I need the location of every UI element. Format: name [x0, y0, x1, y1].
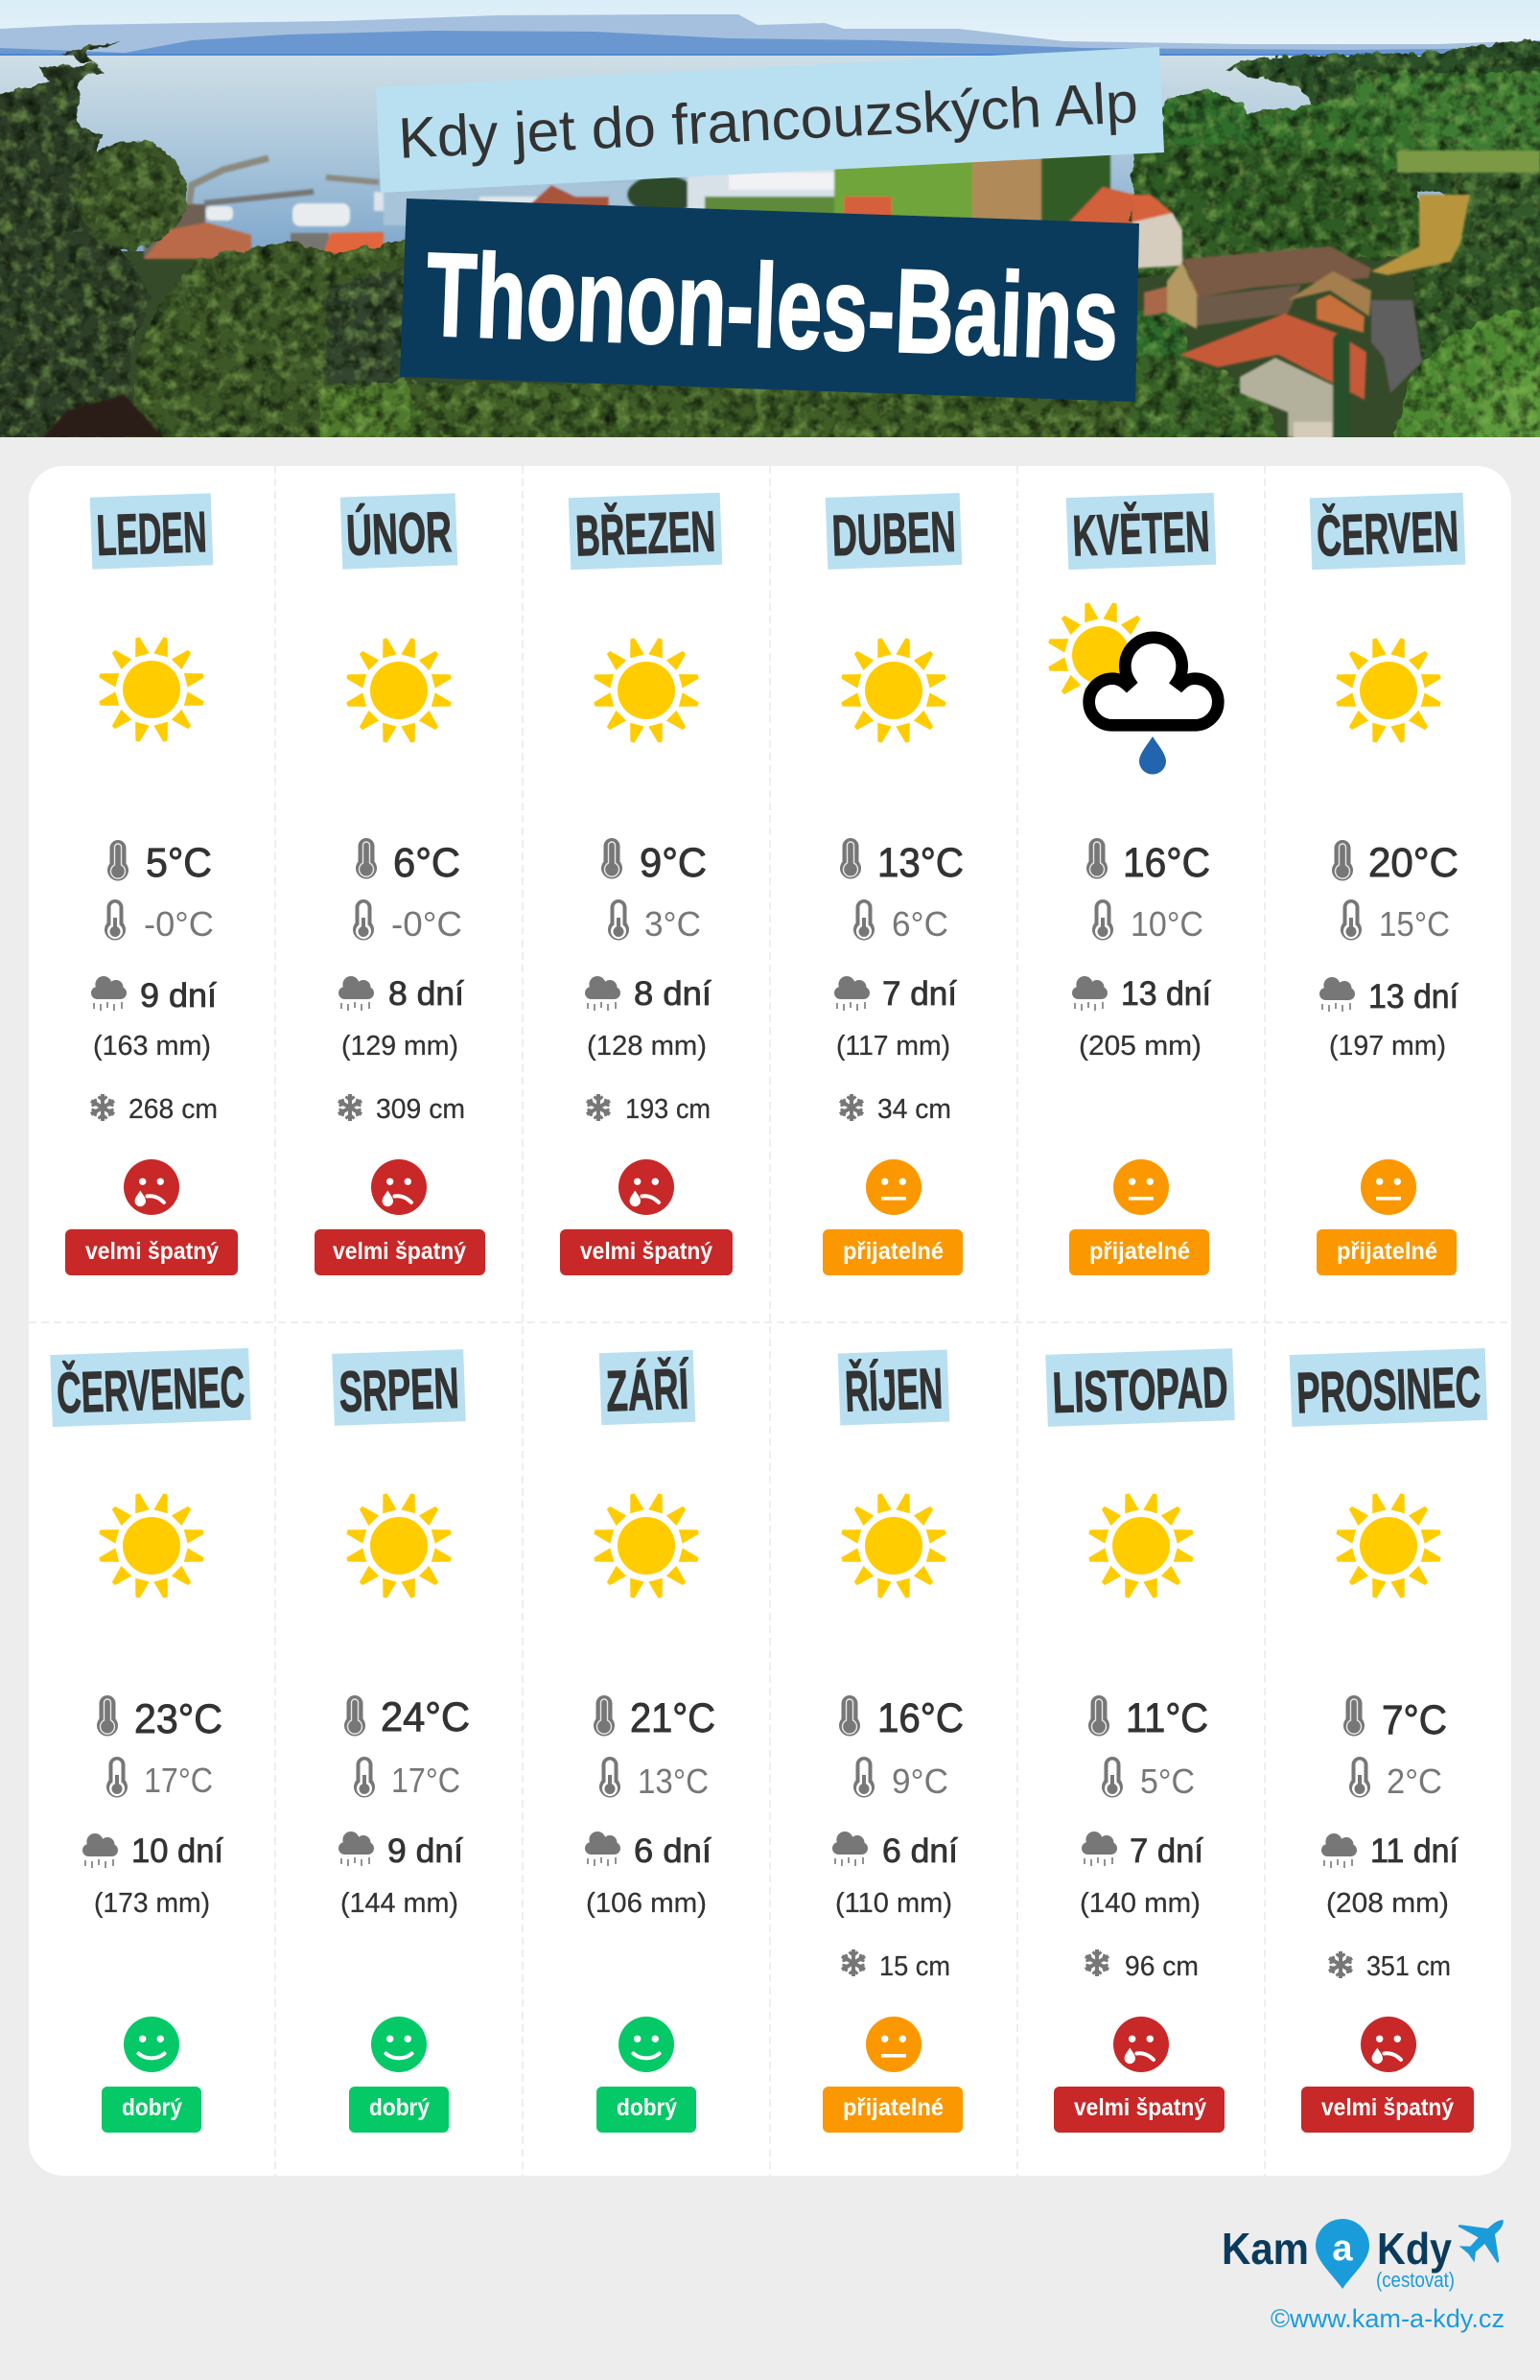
- icon: min thermometer: [1349, 1757, 1370, 1797]
- month heading: [90, 493, 213, 570]
- icon: snowflake: [338, 1094, 362, 1121]
- icon: min thermometer: [608, 899, 629, 940]
- snowfall: 34 cm: [877, 1094, 951, 1125]
- precipitation: (110 mm): [835, 1888, 952, 1919]
- icon: min thermometer: [1102, 1757, 1123, 1797]
- min temperature: 13°C: [638, 1762, 709, 1801]
- month heading: SRPEN: [338, 1356, 460, 1424]
- panel: June: [1310, 493, 1465, 1275]
- icon: sun: [840, 1492, 947, 1599]
- icon: map pin: a: [1332, 2228, 1353, 2269]
- min temperature: -0°C: [391, 904, 462, 944]
- rating badge: velmi špatný: [1321, 2094, 1454, 2121]
- month heading: LISTOPAD: [1051, 1355, 1229, 1425]
- rating badge: [65, 1229, 238, 1275]
- month heading: [1066, 493, 1216, 570]
- max temperature: 23°C: [134, 1696, 222, 1742]
- min temperature: 10°C: [1131, 904, 1203, 944]
- month heading: [838, 1350, 949, 1425]
- rainy days: 13 dní: [1368, 978, 1458, 1015]
- month heading: [1045, 1348, 1235, 1427]
- icon: min thermometer: [353, 899, 374, 940]
- icon: sun: [1335, 1492, 1442, 1599]
- icon: max thermometer: [356, 838, 377, 878]
- icon: min thermometer: [599, 1757, 620, 1797]
- icon: min thermometer: [354, 1757, 375, 1797]
- precipitation: (208 mm): [1326, 1888, 1449, 1919]
- snowfall: 351 cm: [1366, 1951, 1451, 1982]
- icon: crying face: [124, 1159, 179, 1215]
- max temperature: 7°C: [1382, 1697, 1447, 1743]
- title banner: [400, 198, 1139, 402]
- panel: May: [1047, 493, 1218, 1275]
- min temperature: 17°C: [391, 1761, 460, 1800]
- month heading: DUBEN: [830, 500, 957, 568]
- max temperature: 16°C: [1123, 840, 1210, 886]
- min temperature: 6°C: [892, 904, 948, 944]
- icon: max thermometer: [594, 1695, 615, 1736]
- icon: rain cloud: [832, 1832, 868, 1866]
- icon: max thermometer: [840, 838, 861, 878]
- rating badge: [102, 2087, 201, 2133]
- rainy days: 7 dní: [882, 975, 957, 1013]
- icon: sun: [345, 1492, 453, 1599]
- icon: neutral face: [866, 2017, 922, 2072]
- snowfall: 268 cm: [128, 1094, 218, 1125]
- month heading: [1310, 493, 1465, 570]
- rating badge: [596, 2087, 696, 2133]
- logo: Kam a Kdy: Kdy: [1377, 2224, 1452, 2274]
- icon: rain cloud: [1319, 977, 1355, 1012]
- icon: rain cloud: [1321, 1833, 1357, 1868]
- icon: sun: [840, 637, 947, 744]
- icon: smiling face: [124, 2017, 179, 2072]
- panel: April: [823, 493, 964, 1275]
- month heading: ÚNOR: [345, 500, 453, 568]
- precipitation: (144 mm): [340, 1888, 458, 1919]
- max temperature: 6°C: [393, 840, 460, 886]
- icon: max thermometer: [1343, 1695, 1365, 1736]
- month heading: [332, 1349, 466, 1426]
- icon: crying face: [1361, 2017, 1416, 2072]
- min temperature: 3°C: [644, 904, 701, 944]
- month heading: [569, 493, 722, 570]
- icon: max thermometer: [839, 1695, 860, 1736]
- rating badge: [823, 2087, 963, 2133]
- rainy days: 8 dní: [634, 975, 712, 1013]
- max temperature: 16°C: [877, 1695, 964, 1741]
- icon: max thermometer: [601, 838, 622, 878]
- rating badge: velmi špatný: [1074, 2094, 1206, 2121]
- precipitation: (163 mm): [93, 1031, 211, 1062]
- icon: rain cloud: [1072, 976, 1108, 1011]
- panel: December: [1290, 1348, 1487, 2133]
- rainy days: 6 dní: [634, 1832, 712, 1870]
- icon: sun: [1335, 637, 1442, 744]
- icon: sun: [593, 1492, 700, 1599]
- icon: smiling face: [371, 2017, 427, 2072]
- month heading: BŘEZEN: [574, 499, 716, 569]
- panel: November: [1045, 1348, 1235, 2133]
- rating badge: velmi špatný: [333, 1238, 466, 1265]
- panel: August: [332, 1349, 470, 2133]
- icon: min thermometer: [853, 899, 875, 940]
- icon: rain cloud: [1082, 1832, 1117, 1866]
- logo: Kam a Kdy: (cestovat): [1376, 2268, 1455, 2292]
- rating badge: [315, 1229, 485, 1275]
- icon: sun: [98, 1492, 205, 1599]
- rating badge: dobrý: [617, 2094, 677, 2121]
- rating badge: [349, 2087, 449, 2133]
- icon: sun: [345, 637, 453, 744]
- panel: March: [560, 493, 733, 1275]
- rating badge: dobrý: [122, 2094, 182, 2121]
- month heading: ŘÍJEN: [844, 1356, 944, 1424]
- logo: Kam a Kdy: Kam: [1222, 2224, 1309, 2274]
- icon: min thermometer: [1092, 899, 1113, 940]
- max temperature: 13°C: [877, 840, 964, 886]
- min temperature: 9°C: [892, 1762, 948, 1801]
- panel: February: [315, 493, 485, 1275]
- rainy days: 13 dní: [1121, 975, 1211, 1013]
- icon: min thermometer: [853, 1757, 875, 1797]
- precipitation: (129 mm): [341, 1031, 458, 1062]
- min temperature: 17°C: [144, 1761, 213, 1800]
- icon: rain cloud: [585, 1832, 620, 1866]
- website credit: ©www.kam-a-kdy.cz: [1271, 2304, 1505, 2333]
- icon: max thermometer: [97, 1695, 118, 1736]
- icon: rain cloud: [585, 976, 620, 1011]
- max temperature: 21°C: [630, 1695, 715, 1741]
- precipitation: (205 mm): [1079, 1031, 1202, 1062]
- snowfall: 96 cm: [1125, 1951, 1199, 1982]
- meadow and field: [1371, 151, 1540, 275]
- logo: Kam a Kdy: [1222, 2219, 1504, 2292]
- rainy days: 9 dní: [387, 1832, 463, 1870]
- rating badge: přijatelné: [843, 2094, 944, 2121]
- rainy days: 8 dní: [388, 975, 464, 1013]
- min temperature: 5°C: [1140, 1762, 1195, 1801]
- icon: neutral face: [1113, 1159, 1169, 1215]
- max temperature: 9°C: [640, 840, 707, 886]
- panel: September: [585, 1350, 715, 2133]
- subtitle text: Kdy jet do francouzských Alp: [397, 70, 1139, 171]
- month heading: ČERVENEC: [56, 1355, 245, 1425]
- icon: min thermometer: [106, 1757, 128, 1797]
- min temperature: 15°C: [1379, 904, 1450, 944]
- month heading: KVĚTEN: [1071, 500, 1211, 568]
- icon: crying face: [1113, 2017, 1169, 2072]
- icon: min thermometer: [1341, 899, 1362, 940]
- rating badge: [1317, 1229, 1457, 1275]
- rainy days: 10 dní: [131, 1832, 223, 1870]
- precipitation: (197 mm): [1329, 1031, 1446, 1062]
- precipitation: (140 mm): [1080, 1888, 1201, 1919]
- rating badge: [1301, 2087, 1474, 2133]
- harbour: [144, 158, 412, 259]
- icon: rain cloud: [834, 976, 870, 1011]
- icon: snowflake: [587, 1094, 610, 1121]
- icon: max thermometer: [344, 1695, 365, 1736]
- month heading: [826, 493, 962, 570]
- icon: neutral face: [866, 1159, 922, 1215]
- min temperature: -0°C: [144, 904, 214, 944]
- panel: July: [50, 1348, 251, 2133]
- rainy days: 7 dní: [1130, 1832, 1203, 1870]
- precipitation: (117 mm): [836, 1031, 950, 1062]
- icon: max thermometer: [107, 840, 128, 880]
- max temperature: 11°C: [1126, 1695, 1208, 1741]
- icon: smiling face: [618, 2017, 674, 2072]
- snowfall: 309 cm: [376, 1094, 465, 1125]
- min temperature: 2°C: [1387, 1762, 1442, 1801]
- icon: max thermometer: [1332, 840, 1353, 880]
- icon: crying face: [371, 1159, 427, 1215]
- houses: [1132, 195, 1422, 448]
- rating badge: [823, 1229, 963, 1275]
- icon: rain cloud: [91, 976, 127, 1011]
- icon: neutral face: [1361, 1159, 1416, 1215]
- icon: sun: [593, 637, 700, 744]
- marina and town between the banners: [383, 155, 1133, 226]
- rating badge: dobrý: [369, 2094, 430, 2121]
- max temperature: 24°C: [381, 1694, 470, 1740]
- icon: rain cloud: [338, 1832, 374, 1866]
- panel: January: [65, 493, 238, 1275]
- icon: min thermometer: [105, 899, 126, 940]
- icon: sun: [1087, 1492, 1195, 1599]
- month heading: ZÁŘÍ: [605, 1356, 690, 1423]
- icon: map pin: [1316, 2219, 1369, 2289]
- month heading: [340, 493, 457, 570]
- panel: calendar background: [29, 466, 1511, 2176]
- precipitation: (106 mm): [586, 1888, 707, 1919]
- rating badge: [1069, 1229, 1209, 1275]
- rainy days: 6 dní: [882, 1832, 958, 1870]
- icon: max thermometer: [1088, 1695, 1109, 1736]
- icon: snowflake: [1329, 1951, 1352, 1978]
- month heading: [50, 1348, 251, 1427]
- header photo: lake and town landscape: [0, 0, 1540, 479]
- rating badge: [1054, 2087, 1225, 2133]
- rating badge: [560, 1229, 733, 1275]
- icon: snowflake: [840, 1094, 863, 1121]
- rainy days: 11 dní: [1370, 1832, 1458, 1870]
- month heading: LEDEN: [95, 500, 208, 568]
- snowfall: 193 cm: [625, 1094, 711, 1125]
- subtitle banner: [376, 47, 1164, 193]
- max temperature: 5°C: [146, 840, 212, 886]
- month heading: [599, 1350, 695, 1425]
- rating badge: přijatelné: [1089, 1238, 1190, 1265]
- icon: rain cloud: [338, 976, 374, 1011]
- icon: sun with rain cloud: [1047, 601, 1218, 775]
- max temperature: 20°C: [1368, 840, 1458, 886]
- icon: max thermometer: [1086, 838, 1108, 878]
- rating badge: přijatelné: [843, 1238, 944, 1265]
- icon: crying face: [618, 1159, 674, 1215]
- snowfall: 15 cm: [879, 1951, 950, 1982]
- precipitation: (128 mm): [587, 1031, 707, 1062]
- icon: rain cloud: [82, 1833, 118, 1868]
- icon: airplane: [1458, 2220, 1504, 2263]
- icon: snowflake: [1085, 1949, 1108, 1976]
- rating badge: velmi špatný: [580, 1238, 712, 1265]
- icon: snowflake: [91, 1094, 114, 1121]
- rating badge: velmi špatný: [85, 1238, 219, 1265]
- rating badge: přijatelné: [1337, 1238, 1437, 1265]
- icon: sun: [98, 636, 205, 743]
- precipitation: (173 mm): [94, 1888, 210, 1919]
- panel: October: [823, 1350, 964, 2133]
- icon: snowflake: [842, 1949, 865, 1976]
- title text: Thonon-les-Bains: [424, 228, 1121, 385]
- rainy days: 9 dní: [140, 977, 217, 1015]
